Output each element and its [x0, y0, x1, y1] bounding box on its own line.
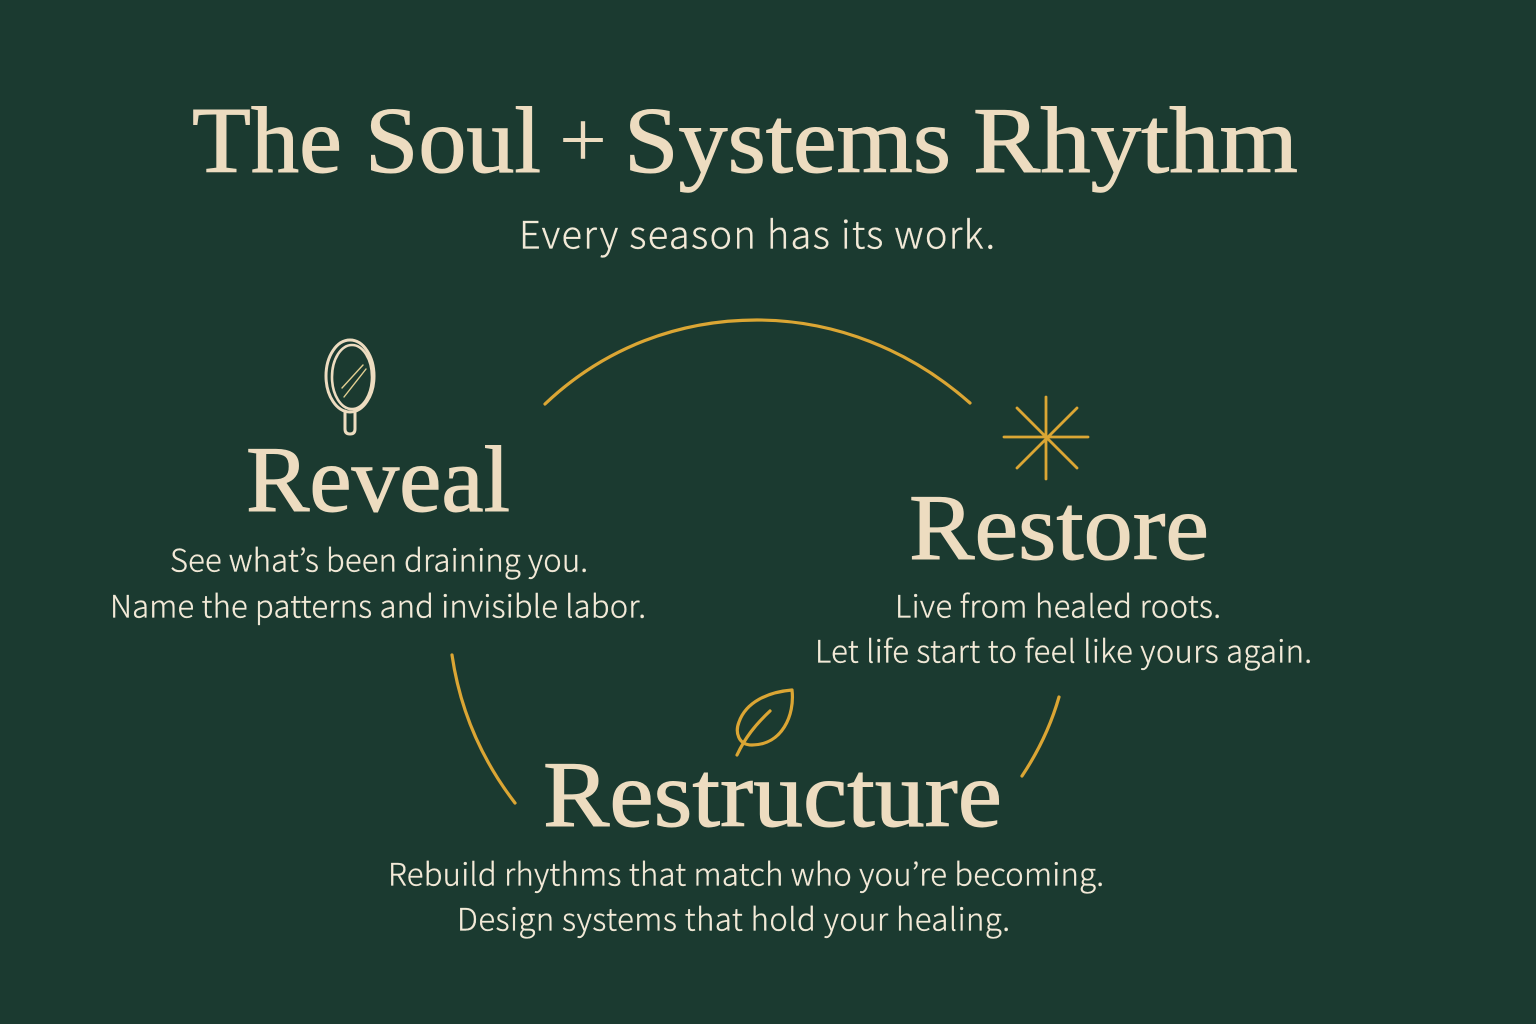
title: The — [192, 89, 342, 193]
title — [192, 89, 1298, 193]
heading: Reveal: Reveal — [246, 428, 510, 532]
text: Restructure description: Design systems that hold your healing. — [457, 894, 1010, 940]
icon: leaf — [737, 690, 792, 755]
text: Reveal description: Name the patterns and invisible labor. — [110, 582, 646, 626]
title: Rhythm — [973, 89, 1298, 193]
panel: Restore — [815, 397, 1312, 672]
text: Restore description — [815, 582, 1312, 672]
heading: Restore: Restore — [909, 476, 1209, 580]
title: Systems — [624, 89, 951, 193]
icon: eight-point star — [1004, 397, 1088, 479]
heading: Restructure: Restructure — [543, 743, 1002, 847]
text: Restore description: Live from healed roots. — [895, 582, 1221, 626]
arrow arc: top, Reveal to Restore — [545, 320, 970, 404]
title: + — [559, 97, 607, 185]
panel: Restructure — [388, 690, 1104, 940]
panel: Reveal — [110, 340, 646, 626]
arrow arc: left, Restructure to Reveal — [452, 655, 515, 803]
text: Reveal description: See what’s been draining you. — [170, 536, 588, 580]
arrow arc: right, Restore to Restructure — [1022, 697, 1059, 776]
icon: hand mirror — [326, 340, 374, 434]
text: Reveal description — [110, 536, 646, 626]
title: Soul — [365, 89, 541, 193]
text: Restructure description: Rebuild rhythms that match who you’re becoming. — [388, 850, 1104, 894]
subtitle: Every season has its work. — [519, 204, 995, 260]
text: Restore description: Let life start to feel like yours again. — [815, 626, 1312, 672]
text: Restructure description — [388, 850, 1104, 940]
